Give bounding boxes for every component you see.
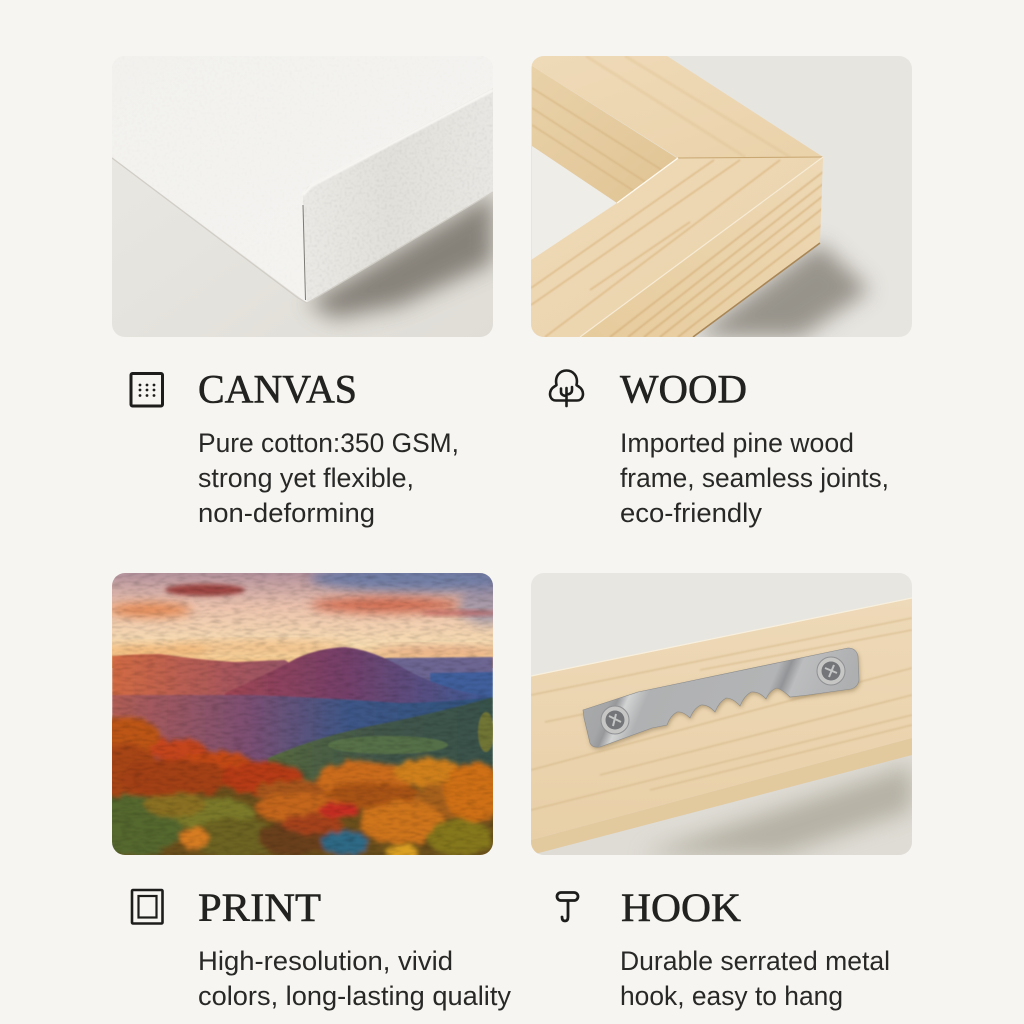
heading: wood: WOOD [620,366,747,412]
left screw [601,706,629,734]
text: hook description: Durable serrated metal [620,946,890,976]
heading: hook: HOOK [621,885,741,930]
icon: canvas weave [131,374,162,406]
text: canvas description: strong yet flexible, [198,463,414,493]
heading: print: PRINT [198,885,321,930]
text: hook description: hook, easy to hang [620,981,843,1011]
icon: sawtooth hanger [583,648,860,749]
panel: print landscape photo [112,573,493,855]
text: print description: High-resolution, vivid [198,946,453,976]
text: wood description: frame, seamless joints, [620,463,889,493]
icon: framed print [132,890,162,924]
text: canvas description: Pure cotton:350 GSM, [198,428,459,458]
text: wood description: eco-friendly [620,498,763,528]
canvas texture [112,573,493,855]
icon: tree [550,370,583,406]
autumn foliage [112,714,493,855]
distant hills [112,647,494,790]
text: canvas description: non-deforming [198,498,375,528]
text: wood description [620,428,889,528]
text: hook description [620,946,890,1011]
panel: canvas corner photo [112,88,493,337]
text: print description: colors, long-lasting quality [198,981,512,1011]
heading: canvas: CANVAS [198,366,357,412]
panel: sawtooth hook photo [531,573,912,855]
text: wood description: Imported pine wood [620,428,854,458]
panel: wood frame photo [531,56,912,337]
sky [112,573,493,668]
text: print description [198,946,512,1011]
text: canvas description [198,428,459,528]
icon: hook [557,892,578,921]
right screw [817,657,845,685]
